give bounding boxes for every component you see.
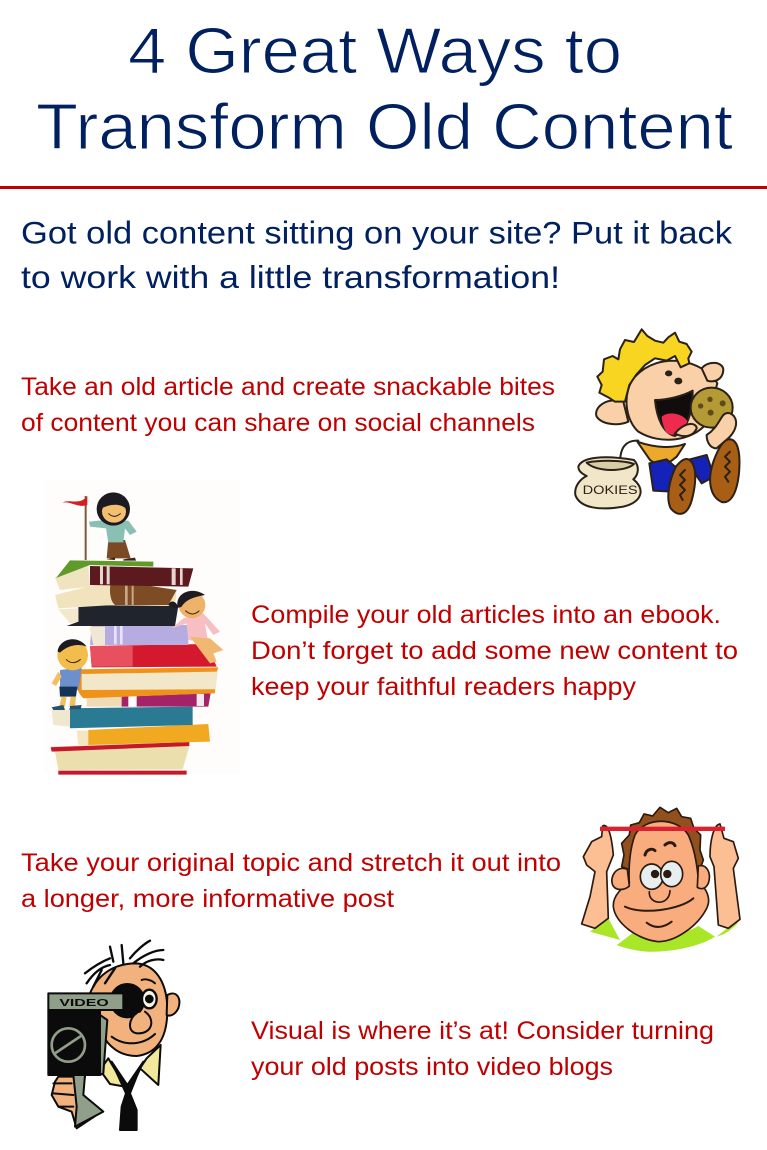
intro text: to work with a little transformation!: [21, 259, 560, 295]
tip 1 text: Take an old article and create snackable bites: [21, 373, 555, 401]
icon: boy eating cookie: [575, 329, 739, 514]
tip 3 text: Take your original topic and stretch it out into: [21, 849, 561, 877]
icon: children on stack of books: [44, 480, 241, 775]
tip 4 text: Visual is where it’s at! Consider turning: [251, 1017, 714, 1045]
tip 2 text: Compile your old articles into an ebook.: [251, 601, 721, 629]
tip 3 text: [21, 849, 561, 913]
tip 1 text: [21, 373, 555, 437]
tip 2 text: Don’t forget to add some new content to: [251, 637, 738, 665]
tip 4 text: your old posts into video blogs: [251, 1053, 613, 1081]
title: [36, 14, 733, 163]
tip 2 text: [251, 601, 738, 701]
icon: man stretching rubber band: [582, 807, 740, 952]
tip 4 text: [251, 1017, 714, 1081]
tip 3 text: a longer, more informative post: [21, 885, 394, 913]
title: Transform Old Content: [36, 90, 733, 163]
intro text: Got old content sitting on your site? Put it back: [21, 214, 732, 250]
icon: man with video camera: [48, 941, 179, 1130]
tip 1 text: of content you can share on social channels: [21, 409, 535, 437]
icon: boy eating cookie: DOKIES: [583, 483, 638, 497]
title: 4 Great Ways to: [128, 14, 622, 87]
tip 2 text: keep your faithful readers happy: [251, 673, 637, 701]
intro text: [21, 214, 732, 295]
icon: man with video camera: VIDEO: [59, 998, 109, 1009]
